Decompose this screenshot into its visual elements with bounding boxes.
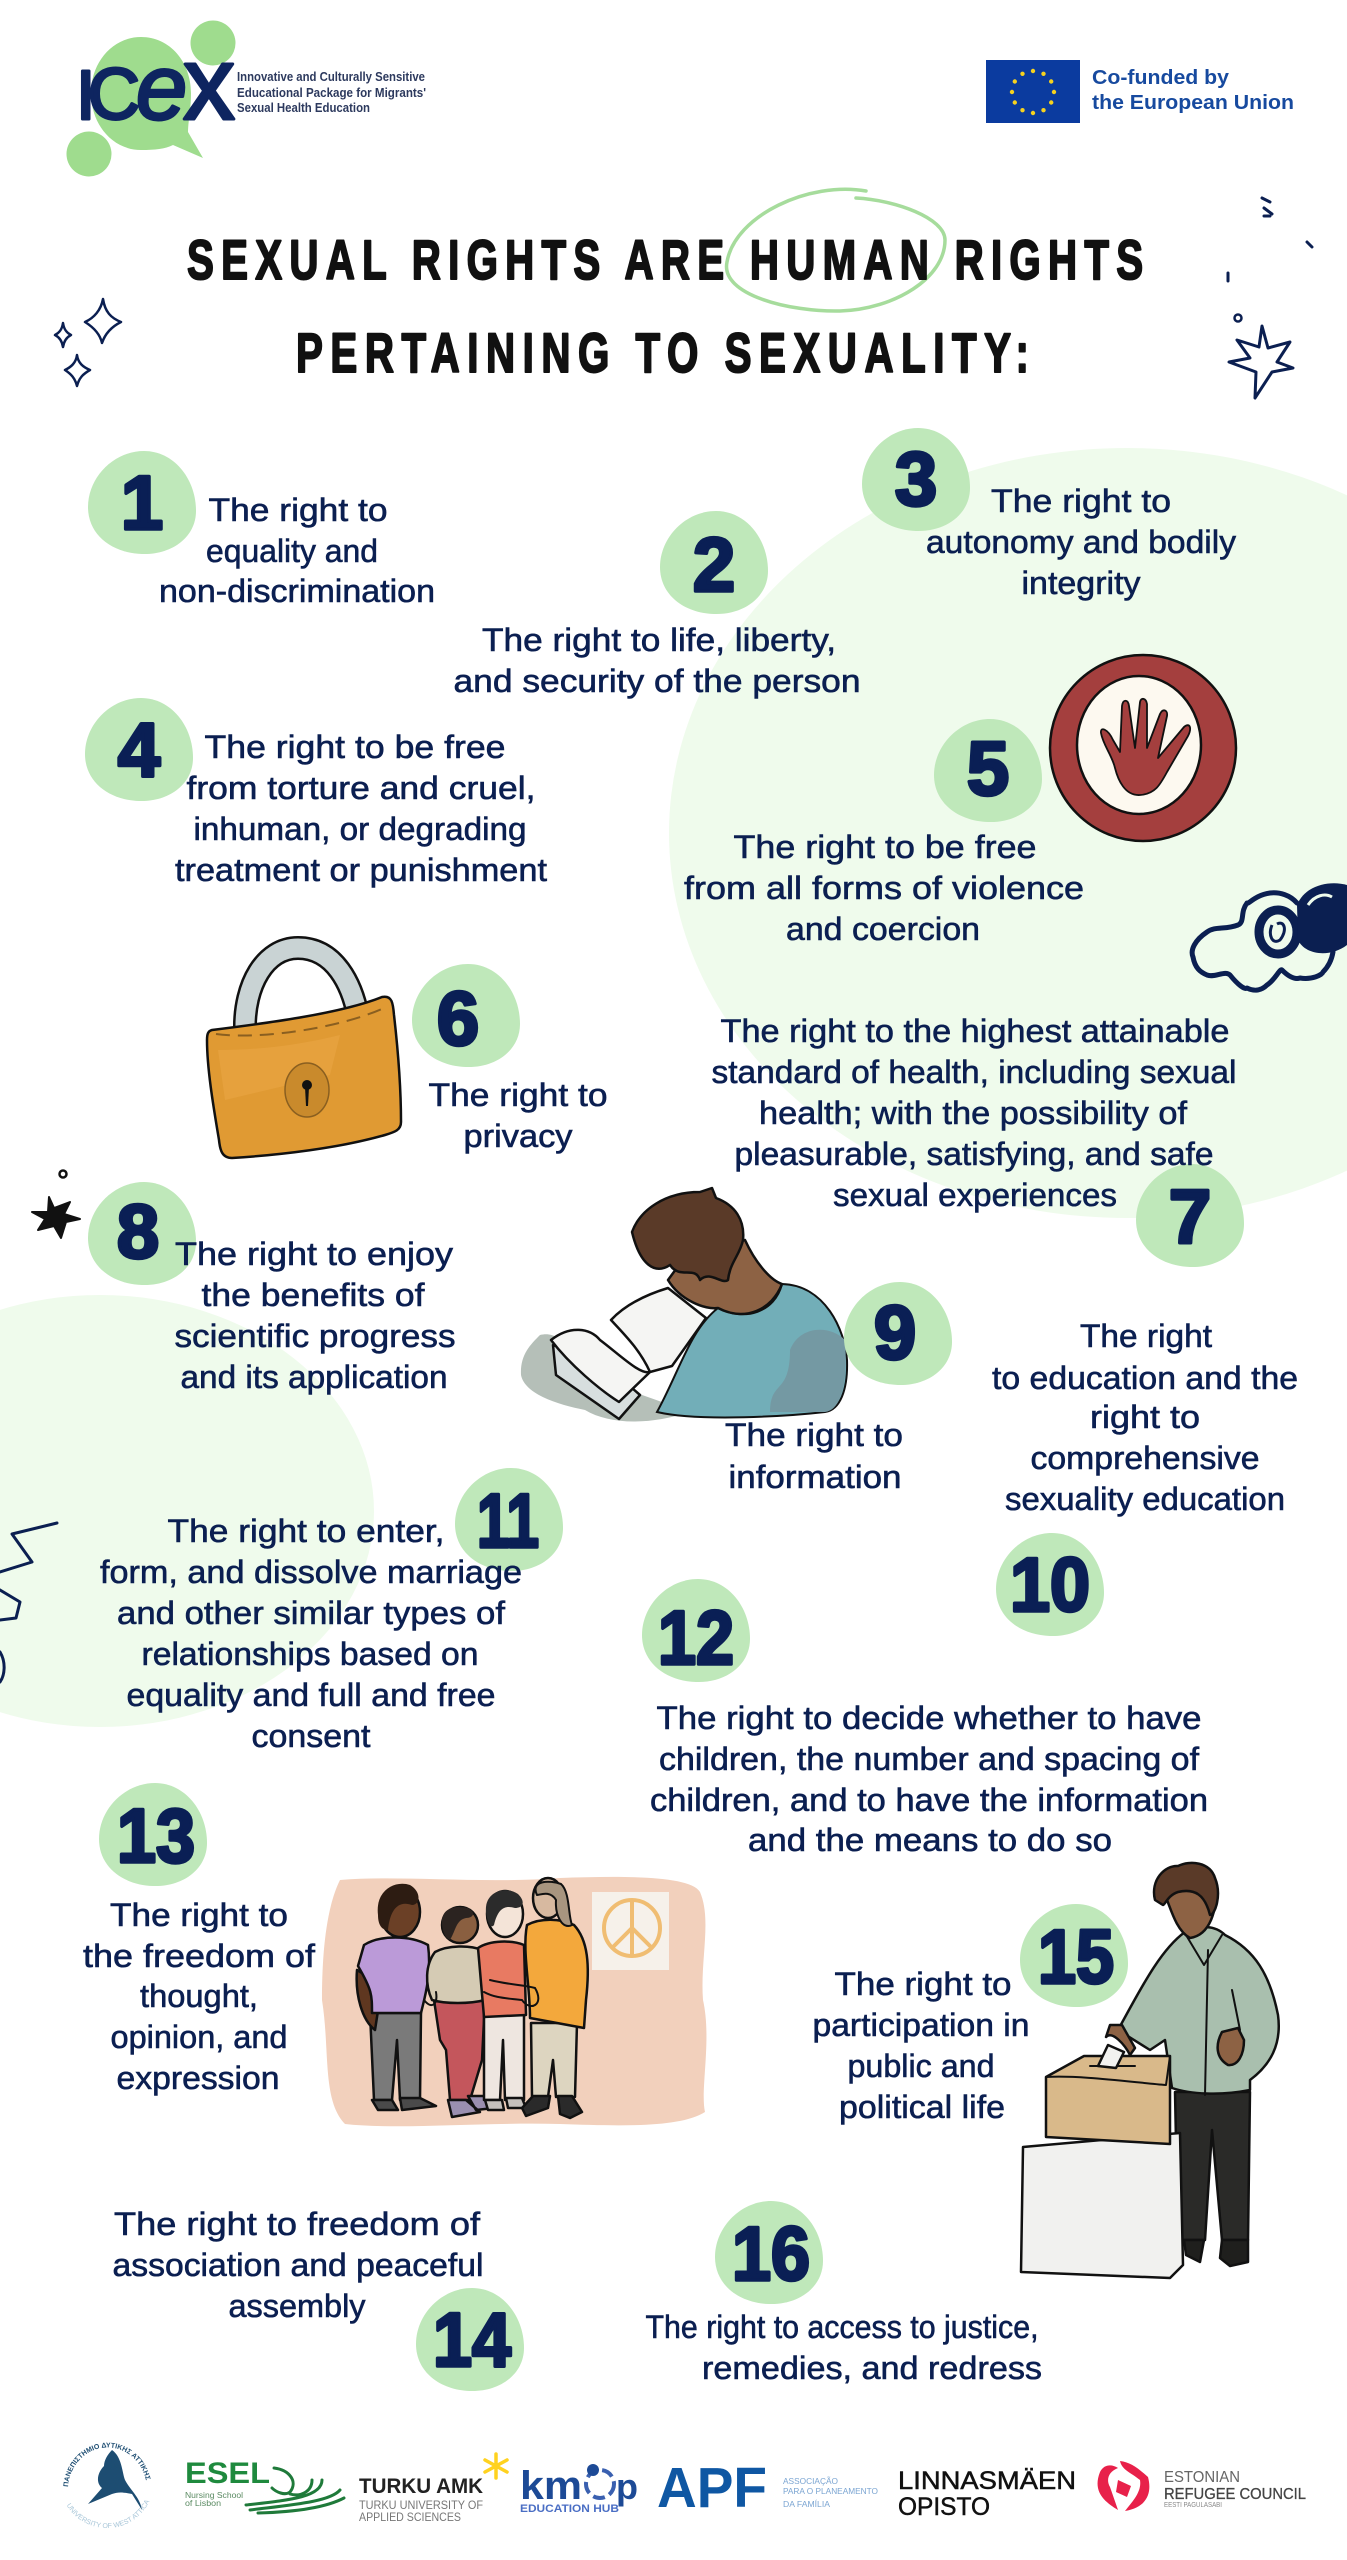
right 13 text: The right to [110, 1897, 288, 1933]
right 3 text [926, 483, 1236, 601]
number badge 1 [88, 451, 196, 554]
right 13 text: expression [116, 2060, 280, 2096]
partner logo: Turku AMK: APPLIED SCIENCES [359, 2510, 461, 2524]
number badge 16: 16 [732, 2212, 810, 2297]
right 12 text: The right to decide whether to have [656, 1700, 1202, 1736]
number badge 10: 10 [1010, 1543, 1090, 1628]
ICEX logo [66, 20, 426, 176]
right 11 text: The right to enter, [168, 1513, 444, 1549]
number badge 3: 3 [895, 437, 937, 522]
right 5 text: The right to be free [734, 829, 1036, 865]
partner logo: University of West Attica [63, 2442, 151, 2528]
right 8 text [174, 1236, 456, 1395]
right 8 text: The right to enjoy [175, 1236, 453, 1272]
number badge 11 [455, 1468, 563, 1571]
legs [1175, 2092, 1250, 2240]
partner logo: KMOP Education Hub: p [616, 2466, 638, 2507]
right 8 text: and its application [180, 1359, 448, 1395]
right 4 text [175, 729, 547, 888]
partner logo: Estonian Refugee Council: REFUGEE COUNCIL [1164, 2486, 1306, 2503]
right 1 text [159, 492, 435, 609]
right 7 text: pleasurable, satisfying, and safe [734, 1136, 1214, 1172]
highlight circle around HUMAN [727, 189, 945, 311]
right 5 text: from all forms of violence [684, 870, 1084, 906]
ICEX logo: Innovative and Culturally Sensitive [237, 69, 425, 84]
EU co-funding mark [986, 60, 1294, 123]
right 15 text: participation in [812, 2007, 1030, 2043]
partner logo: Estonian Refugee Council: EESTI PAGULASABI [1164, 2502, 1222, 2509]
right 13 text: thought, [140, 1978, 258, 2014]
right 10 text: comprehensive [1030, 1440, 1260, 1476]
right 14 text: The right to freedom of [114, 2206, 480, 2242]
right 1 text: equality and [206, 533, 378, 569]
right 16 text [646, 2309, 1042, 2386]
right 15 text: political life [839, 2089, 1005, 2125]
number badge 10 [996, 1533, 1104, 1636]
number badge 5 [934, 719, 1042, 822]
ballot box [1046, 2056, 1170, 2144]
right 2 text [454, 622, 860, 699]
right 5 text: and coercion [786, 911, 980, 947]
right 12 text [650, 1700, 1208, 1858]
partner logo: Turku AMK: TURKU AMK [359, 2475, 483, 2498]
right 16 text: The right to access to justice, [646, 2309, 1038, 2345]
right 11 text [100, 1513, 522, 1754]
number badge 13: 13 [117, 1794, 195, 1879]
illustration: group of four friends [322, 1877, 706, 2126]
title [187, 189, 1143, 385]
number badge 12: 12 [658, 1596, 734, 1681]
number badge 15: 15 [1038, 1915, 1114, 2000]
number badge 9: 9 [874, 1291, 916, 1376]
background blob: right [669, 448, 1347, 1218]
number badge 16 [715, 2201, 823, 2304]
partner logo: KMOP Education Hub [520, 2464, 638, 2515]
number badge 8: 8 [117, 1190, 159, 1275]
right 9 text: information [728, 1459, 902, 1495]
right 5 text [684, 829, 1084, 947]
number badge 1: 1 [121, 461, 163, 546]
right 9 text [725, 1417, 903, 1495]
partner logo: APF: DA FAMÍLIA [783, 2499, 830, 2509]
EU co-funding mark: Co-funded by [1092, 67, 1230, 89]
number badge 4 [85, 698, 193, 801]
decorative squiggle left [0, 1523, 57, 1682]
right 14 text: assembly [228, 2288, 366, 2324]
title: SEXUAL RIGHTS ARE HUMAN RIGHTS [187, 230, 1143, 292]
right 4 text: The right to be free [204, 729, 506, 765]
number badge 5: 5 [967, 727, 1009, 812]
head [1163, 1885, 1216, 1938]
number badge 8 [88, 1182, 196, 1285]
number badge 3 [862, 428, 970, 531]
number badge 7: 7 [1169, 1175, 1211, 1260]
right 15 text: The right to [834, 1966, 1012, 2002]
right 2 text: The right to life, liberty, [482, 622, 836, 658]
right 12 text: children, and to have the information [650, 1782, 1208, 1818]
number badge 7 [1136, 1164, 1244, 1267]
partner logo: Estonian Refugee Council [1098, 2461, 1306, 2511]
pedestal [1021, 2133, 1183, 2278]
partner logo: Linnasmäen Opisto: OPISTO [898, 2493, 990, 2521]
partner logo: ESEL [185, 2457, 344, 2513]
title: PERTAINING TO SEXUALITY: [296, 323, 1029, 385]
number badge 14 [416, 2288, 524, 2391]
right 6 text: privacy [464, 1118, 572, 1154]
poster with peace sign [592, 1892, 669, 1970]
jacket [1118, 1927, 1279, 2094]
right 7 text: The right to the highest attainable [720, 1013, 1230, 1049]
right 3 text: integrity [1022, 565, 1140, 601]
right 16 text: remedies, and redress [702, 2350, 1042, 2386]
right 13 text [83, 1897, 315, 2096]
number badge 12 [642, 1579, 750, 1682]
number badge 9 [844, 1282, 952, 1385]
decorative sparkles left [55, 299, 121, 386]
right 12 text: and the means to do so [748, 1822, 1112, 1858]
ICEX logo: Sexual Health Education [237, 100, 370, 115]
partner logo: University of West Attica: ΠΑΝΕΠΙΣΤΗΜΙΟ ΔΥΤΙΚΗΣ ΑΤΤΙΚΗΣ [63, 2442, 151, 2486]
illustration: stop hand sign [1050, 655, 1236, 841]
person 3 [478, 1890, 526, 2110]
right 9 text: The right to [725, 1417, 903, 1453]
right 10 text [992, 1318, 1298, 1517]
decorative star right [1228, 198, 1312, 398]
right 2 text: and security of the person [454, 663, 860, 699]
right 15 text: public and [848, 2048, 994, 2084]
right 12 text: children, the number and spacing of [659, 1741, 1199, 1777]
ICEX logo: I [76, 56, 95, 134]
right 7 text: standard of health, including sexual [712, 1054, 1236, 1090]
EU co-funding mark: the European Union [1092, 92, 1294, 114]
partner logo: APF: APF [657, 2456, 767, 2520]
partner logo: Turku AMK: TURKU UNIVERSITY OF [359, 2498, 483, 2512]
right 7 text: health; with the possibility of [759, 1095, 1187, 1131]
right 11 text: consent [252, 1718, 371, 1754]
right 8 text: scientific progress [174, 1318, 456, 1354]
partner logo: APF [657, 2456, 878, 2520]
right 11 text: form, and dissolve marriage [100, 1554, 522, 1590]
partner logo: ESEL: Nursing School [185, 2491, 243, 2500]
partner logo: Linnasmäen Opisto [898, 2467, 1076, 2521]
ICEX logo: e [136, 37, 187, 139]
right 1 text: non-discrimination [159, 573, 435, 609]
right 6 text [428, 1077, 608, 1154]
decorative cloud scribble [1192, 883, 1347, 990]
right 7 text: sexual experiences [833, 1177, 1117, 1213]
right 4 text: from torture and cruel, [186, 770, 536, 806]
number badge 15 [1020, 1904, 1128, 2007]
person 2 [427, 1907, 494, 2117]
number badge 2 [660, 511, 768, 614]
partner logo: KMOP Education Hub: km [520, 2464, 582, 2508]
partner logo: ESEL: of Lisbon [185, 2499, 221, 2508]
number badge 11: 11 [477, 1479, 539, 1564]
number badge 13 [99, 1783, 207, 1886]
ballot and hand [1098, 2045, 1124, 2068]
illustration: padlock [207, 948, 401, 1158]
partner logo: Turku AMK [359, 2454, 507, 2524]
partner logo: Estonian Refugee Council: ESTONIAN [1164, 2469, 1240, 2486]
background blob: left [0, 1295, 374, 1727]
ICEX logo: x [183, 26, 235, 142]
right 10 text: sexuality education [1005, 1481, 1285, 1517]
right 3 text: autonomy and bodily [926, 524, 1236, 560]
right 14 text: association and peaceful [112, 2247, 484, 2283]
ICEX logo: Educational Package for Migrants' [237, 85, 426, 100]
partner logo: APF: ASSOCIAÇÃO [783, 2476, 838, 2486]
right 10 text: to education and the [992, 1360, 1298, 1396]
right 4 text: treatment or punishment [175, 852, 547, 888]
person 4 [522, 1878, 588, 2118]
illustration: person voting at ballot box [1021, 1863, 1279, 2278]
number badge 14: 14 [433, 2298, 511, 2383]
right 13 text: the freedom of [83, 1938, 315, 1974]
ICEX logo: C [88, 55, 140, 135]
decorative star left [32, 1170, 80, 1238]
right 11 text: relationships based on [142, 1636, 478, 1672]
number badge 6 [412, 964, 520, 1067]
right 14 text [112, 2206, 484, 2324]
right 11 text: and other similar types of [117, 1595, 505, 1631]
right 10 text: The right [1080, 1318, 1212, 1354]
partner logo: ESEL: ESEL [185, 2457, 270, 2490]
number badge 2: 2 [693, 523, 735, 608]
illustration: person reading a book [521, 1188, 847, 1422]
right 15 text [812, 1966, 1030, 2125]
right 6 text: The right to [428, 1077, 608, 1113]
right 4 text: inhuman, or degrading [194, 811, 526, 847]
hand on the right [1218, 2028, 1244, 2065]
right 10 text: right to [1090, 1399, 1200, 1435]
right 7 text [712, 1013, 1236, 1213]
partner logo: Linnasmäen Opisto: LINNASMÄEN [898, 2467, 1076, 2495]
right 11 text: equality and full and free [126, 1677, 495, 1713]
partner logo: APF: PARA O PLANEAMENTO [783, 2486, 878, 2496]
person 1 [357, 1884, 436, 2110]
number badge 6: 6 [437, 977, 479, 1062]
right 8 text: the benefits of [202, 1277, 425, 1313]
right 13 text: opinion, and [110, 2019, 288, 2055]
right 3 text: The right to [991, 483, 1171, 519]
right 1 text: The right to [208, 492, 388, 528]
number badge 4: 4 [118, 708, 160, 793]
partner logo: KMOP Education Hub: EDUCATION HUB [520, 2503, 619, 2515]
partner logo: University of West Attica: UNIVERSITY OF WEST ATTICA [67, 2500, 150, 2528]
